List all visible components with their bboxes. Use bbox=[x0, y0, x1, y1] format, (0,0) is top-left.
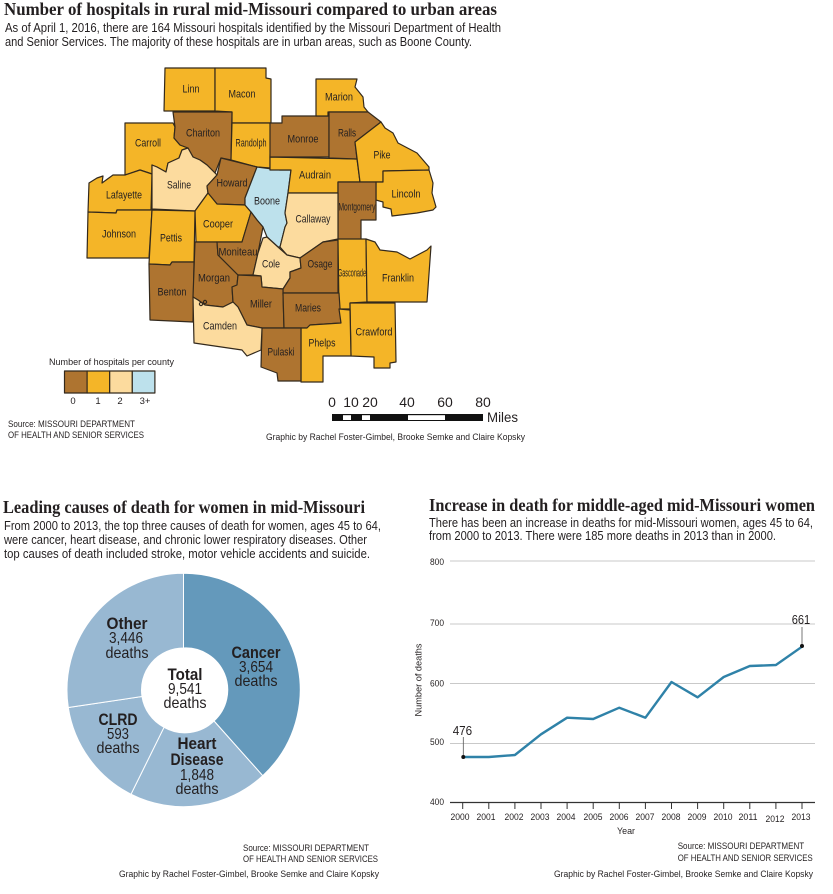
source: hospitals map: Source: MISSOURI DEPARTMENT bbox=[8, 419, 135, 430]
x axis labels: 2009 bbox=[688, 812, 706, 823]
label: Cancer: 3,654 bbox=[239, 659, 273, 676]
label: Total bbox=[164, 665, 206, 712]
label: Other: Other bbox=[106, 614, 148, 633]
map: counties by number of hospitals: Maries bbox=[295, 302, 321, 314]
x axis labels: 2003 bbox=[530, 812, 550, 823]
map: counties by number of hospitals: Gasconade bbox=[338, 268, 366, 280]
y axis labels: 800 bbox=[430, 557, 444, 568]
map: counties by number of hospitals: Osage bbox=[308, 258, 332, 270]
source and credit: donut chart: Graphic by Rachel Foster-Gimbel, Brooke Semke and Claire Kopsky bbox=[119, 869, 379, 880]
source and credit: donut chart: Source: MISSOURI DEPARTMENT bbox=[243, 843, 369, 854]
label: Other: deaths bbox=[106, 645, 148, 662]
x axis title: Year bbox=[617, 826, 635, 837]
label: Cancer: Cancer bbox=[232, 643, 281, 662]
map: counties by number of hospitals: Johnson bbox=[102, 228, 136, 240]
text block: hospitals intro bbox=[5, 20, 501, 49]
map: counties by number of hospitals: Marion bbox=[325, 92, 353, 104]
callout: 661 bbox=[792, 612, 810, 648]
x axis labels: 2007 bbox=[636, 812, 654, 823]
map: counties by number of hospitals: Howard bbox=[216, 178, 248, 190]
x axis labels bbox=[450, 812, 810, 825]
source and credit: donut chart bbox=[119, 843, 379, 880]
label: Heart Disease: Disease bbox=[170, 750, 224, 769]
source and credit: line chart bbox=[554, 841, 813, 880]
legend: number of hospitals per county: 2 bbox=[117, 396, 123, 407]
y axis labels: 500 bbox=[430, 737, 444, 748]
map: counties by number of hospitals: Morgan bbox=[198, 272, 230, 284]
map: counties by number of hospitals: Franklin bbox=[382, 272, 414, 284]
source and credit: line chart: Source: MISSOURI DEPARTMENT bbox=[678, 841, 804, 852]
text block: hospitals intro: As of April 1, 2016, there are 164 Missouri hospitals identified by the Missouri Department of Health bbox=[5, 20, 501, 35]
x axis labels: 2004 bbox=[556, 812, 576, 823]
map: counties by number of hospitals: Pike bbox=[374, 150, 390, 162]
map: counties by number of hospitals: Cole bbox=[262, 258, 280, 270]
map: counties by number of hospitals: Cooper bbox=[203, 218, 233, 230]
map: counties by number of hospitals: Benton bbox=[158, 286, 186, 298]
map: counties by number of hospitals: Moniteau bbox=[218, 246, 258, 258]
source: hospitals map: OF HEALTH AND SENIOR SERVICES bbox=[8, 430, 144, 441]
label: CLRD: deaths bbox=[96, 740, 140, 757]
map: counties by number of hospitals: Macon bbox=[228, 88, 256, 100]
map scale bar: Miles bbox=[487, 409, 518, 425]
label: CLRD: 593 bbox=[107, 726, 129, 743]
label: Other: 3,446 bbox=[109, 630, 143, 647]
x axis labels: 2012 bbox=[766, 814, 784, 825]
label: Total: deaths bbox=[164, 695, 206, 712]
x axis labels: 2005 bbox=[584, 812, 602, 823]
source and credit: donut chart: OF HEALTH AND SENIOR SERVICES bbox=[243, 854, 378, 865]
y axis labels: 600 bbox=[430, 678, 444, 690]
map scale bar: 80 bbox=[475, 394, 491, 410]
legend: number of hospitals per county: Number of hospitals per county bbox=[49, 357, 174, 368]
map: counties by number of hospitals: Pulaski bbox=[268, 346, 294, 358]
text block: leading causes intro: From 2000 to 2013, the top three causes of death for women, ages 45 to 64, bbox=[4, 518, 381, 533]
source: hospitals map bbox=[8, 419, 144, 441]
text block: hospitals intro: and Senior Services. The majority of these hospitals are in urban areas, such as Boone County. bbox=[5, 34, 472, 49]
map: counties by number of hospitals: Phelps bbox=[308, 338, 336, 350]
label: CLRD: CLRD bbox=[98, 710, 138, 729]
map: counties by number of hospitals: Carroll bbox=[135, 138, 161, 150]
map: counties by number of hospitals: Randolph bbox=[236, 138, 266, 150]
map scale bar: 20 bbox=[362, 394, 378, 410]
callout: 476: 476 bbox=[453, 723, 472, 738]
legend: number of hospitals per county: 1 bbox=[95, 396, 101, 407]
map scale bar bbox=[328, 394, 518, 425]
x axis labels: 2008 bbox=[662, 812, 680, 823]
text block: increase in death intro: from 2000 to 2013. There were 185 more deaths in 2013 than in 2000. bbox=[429, 528, 776, 543]
legend: number of hospitals per county: 3+ bbox=[140, 396, 151, 407]
line chart: deaths by year bbox=[414, 557, 815, 837]
text block: leading causes intro bbox=[3, 518, 381, 561]
donut chart: causes of death bbox=[67, 573, 300, 807]
map: counties by number of hospitals: Ralls bbox=[338, 128, 356, 140]
x axis labels: 2011 bbox=[738, 812, 758, 823]
x axis labels: 2010 bbox=[714, 812, 732, 823]
map: counties by number of hospitals: Crawford bbox=[356, 326, 392, 338]
map: counties by number of hospitals: Lincoln bbox=[392, 188, 420, 200]
label: Total: Total bbox=[168, 665, 202, 684]
y axis labels: 400 bbox=[430, 797, 444, 808]
map scale bar: 10 bbox=[343, 394, 359, 410]
text block: leading causes intro: were cancer, heart disease, and chronic lower respiratory diseases. Other bbox=[3, 532, 368, 547]
callout: 661: 661 bbox=[792, 612, 810, 627]
legend: number of hospitals per county bbox=[49, 357, 174, 407]
map: counties by number of hospitals: Saline bbox=[167, 180, 191, 192]
label: Heart Disease: deaths bbox=[176, 781, 218, 798]
map: counties by number of hospitals: Chariton bbox=[186, 128, 220, 140]
map: counties by number of hospitals: Pettis bbox=[160, 232, 182, 244]
y axis title: Number of deaths bbox=[414, 643, 425, 716]
map: counties by number of hospitals: Callaway bbox=[296, 214, 331, 226]
map: counties by number of hospitals: Boone bbox=[254, 196, 280, 208]
title: increase in death: Increase in death for middle-aged mid-Missouri women bbox=[429, 495, 815, 515]
label: Total: 9,541 bbox=[168, 681, 202, 698]
map: counties by number of hospitals: Monroe bbox=[288, 134, 318, 146]
label: Cancer: deaths bbox=[234, 673, 278, 690]
label: Heart Disease bbox=[170, 734, 224, 798]
text block: leading causes intro: top causes of death included stroke, motor vehicle accidents and suicide. bbox=[4, 546, 370, 561]
map: counties by number of hospitals: Lafayette bbox=[106, 190, 142, 202]
data line bbox=[463, 647, 802, 757]
map: counties by number of hospitals: Montgomery bbox=[338, 202, 376, 214]
y axis labels bbox=[430, 557, 444, 808]
map: counties by number of hospitals: Audrain bbox=[299, 170, 331, 182]
x axis labels: 2013 bbox=[792, 812, 810, 823]
map: counties by number of hospitals: Miller bbox=[250, 298, 272, 310]
y axis labels: 700 bbox=[430, 618, 444, 629]
x axis labels: 2001 bbox=[476, 812, 496, 823]
label: Other bbox=[106, 614, 148, 662]
x axis labels: 2006 bbox=[610, 812, 628, 823]
x axis labels: 2000 bbox=[450, 812, 470, 823]
map scale bar: 60 bbox=[437, 394, 453, 410]
label: Cancer bbox=[232, 643, 281, 690]
map scale bar: 0 bbox=[328, 394, 336, 410]
label: Heart Disease: 1,848 bbox=[180, 767, 214, 784]
callout: 476 bbox=[453, 723, 472, 759]
map: counties by number of hospitals bbox=[87, 68, 436, 382]
x axis labels: 2002 bbox=[504, 812, 524, 823]
map: counties by number of hospitals: Linn bbox=[182, 84, 200, 96]
label: Heart Disease: Heart bbox=[178, 734, 217, 753]
text block: increase in death intro bbox=[429, 515, 813, 543]
map: counties by number of hospitals: Camden bbox=[203, 320, 237, 332]
label: CLRD bbox=[96, 710, 140, 757]
title: leading causes of death: Leading causes of death for women in mid-Missouri bbox=[3, 497, 365, 517]
map scale bar: 40 bbox=[399, 394, 415, 410]
legend: number of hospitals per county: 0 bbox=[70, 396, 76, 407]
credit: hospitals map: Graphic by Rachel Foster-Gimbel, Brooke Semke and Claire Kopsky bbox=[266, 432, 525, 443]
